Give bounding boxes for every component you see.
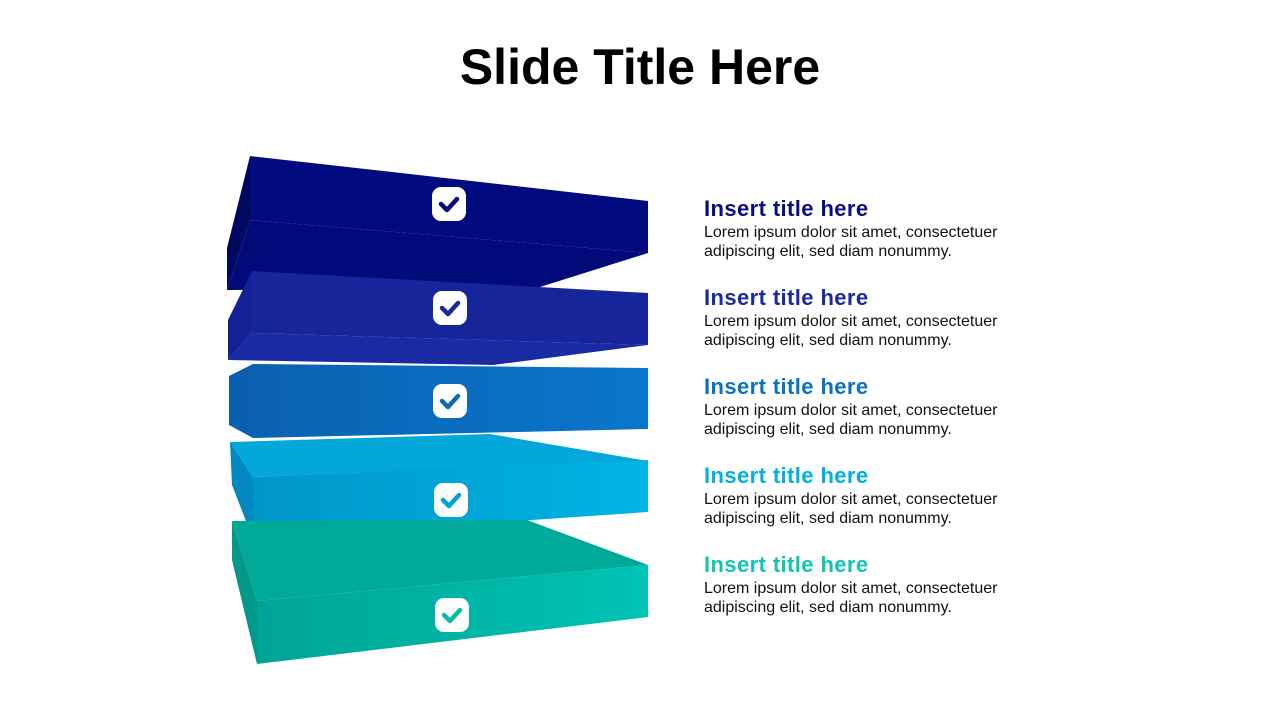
text block 1 <box>704 196 998 260</box>
text block 2 <box>704 285 998 349</box>
layer 4 <box>230 434 648 539</box>
text block 3 <box>704 374 998 438</box>
text block 4: Lorem ipsum dolor sit amet, consectetuer <box>704 491 997 508</box>
icon: check 5 <box>435 598 469 632</box>
text block 3: Lorem ipsum dolor sit amet, consectetuer <box>704 402 997 419</box>
text block 1: Insert title here <box>704 196 869 221</box>
layer 2 <box>228 271 648 365</box>
text block 5 <box>704 552 998 616</box>
icon: check 3 <box>433 384 467 418</box>
text block 3: adipiscing elit, sed diam nonummy. <box>704 421 952 438</box>
text block 2: adipiscing elit, sed diam nonummy. <box>704 332 952 349</box>
text block 2: Lorem ipsum dolor sit amet, consectetuer <box>704 313 997 330</box>
text block 4: adipiscing elit, sed diam nonummy. <box>704 510 952 527</box>
text block 3: Insert title here <box>704 374 869 399</box>
text block 1: Lorem ipsum dolor sit amet, consectetuer <box>704 224 997 241</box>
layer 5 <box>232 520 648 664</box>
text block 5: Insert title here <box>704 552 869 577</box>
icon: check 1 <box>432 187 466 221</box>
text block 2: Insert title here <box>704 285 869 310</box>
text block 4 <box>704 463 998 527</box>
text block 4: Insert title here <box>704 463 869 488</box>
layer 3 <box>229 364 648 438</box>
text block 5: adipiscing elit, sed diam nonummy. <box>704 599 952 616</box>
icon: check 4 <box>434 483 468 517</box>
text block 1: adipiscing elit, sed diam nonummy. <box>704 243 952 260</box>
icon: check 2 <box>433 291 467 325</box>
title: Slide Title Here <box>460 39 820 95</box>
layer 1 <box>227 156 648 290</box>
text block 5: Lorem ipsum dolor sit amet, consectetuer <box>704 580 997 597</box>
